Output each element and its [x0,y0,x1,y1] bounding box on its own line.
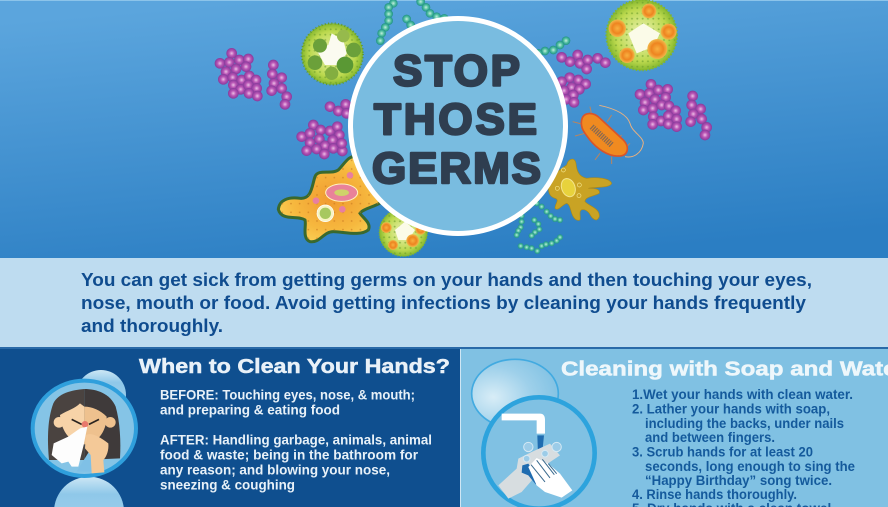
intro text: nose, mouth or food. Avoid getting infections by cleaning your hands frequently [81,292,807,313]
intro text: You can get sick from getting germs on your hands and then touching your eyes, [81,269,812,290]
green virus with orange cores, bottom [379,208,427,256]
orange amoeba [278,156,385,242]
germ illustrations [215,0,712,256]
numbered steps: 2. Lather your hands with soap, [632,402,830,416]
before and after text: AFTER: Handling garbage, animals, animal [160,432,432,448]
intro band [0,258,888,347]
intro text [81,269,812,336]
yellow-brown amoeba [548,159,612,220]
heading: when to clean: When to Clean Your Hands? [139,356,450,378]
icon: bubbles and sneezing person [33,370,136,507]
banner background [0,0,888,258]
numbered steps: 1.Wet your hands with clean water. [632,387,853,402]
numbered steps [632,387,855,507]
before and after text: sneezing & coughing [160,478,295,492]
numbered steps: 3. Scrub hands for at least 20 [632,444,813,460]
before and after text: BEFORE: Touching eyes, nose, & mouth; [160,388,415,402]
orange bacterium [573,105,643,164]
green virus with orange cores, upper right [606,0,677,70]
green virus, upper left [302,23,363,85]
icon: bubble and hand washing [472,359,595,507]
title: STOP THOSE GERMS [372,46,541,193]
numbered steps: including the backs, under nails [645,416,844,431]
title badge [350,18,566,234]
heading: cleaning with soap and water: Cleaning with Soap and Water [561,358,888,380]
panel: when to clean your hands [0,349,460,507]
numbered steps: and between fingers. [645,430,775,445]
before and after text: and preparing & eating food [160,402,340,418]
title: STOP THOSE GERMS: THOSE [374,95,537,144]
before and after text: food & waste; being in the bathroom for [160,448,419,462]
before and after text [160,388,432,492]
purple cocci clusters, left [215,48,352,159]
numbered steps: 4. Rinse hands thoroughly. [632,487,797,502]
numbered steps: “Happy Birthday” song twice. [645,473,832,488]
panel: cleaning with soap and water [461,349,888,507]
title: STOP THOSE GERMS: GERMS [372,144,541,193]
intro text: and thoroughly. [81,315,223,336]
title: STOP THOSE GERMS: STOP [393,46,520,96]
teal strep chains, top [376,0,570,58]
before and after text: any reason; and blowing your nose, [160,462,390,478]
teal strep chains, bottom [514,200,563,254]
numbered steps: seconds, long enough to sing the [645,459,855,474]
purple cocci clusters, right [556,50,712,140]
